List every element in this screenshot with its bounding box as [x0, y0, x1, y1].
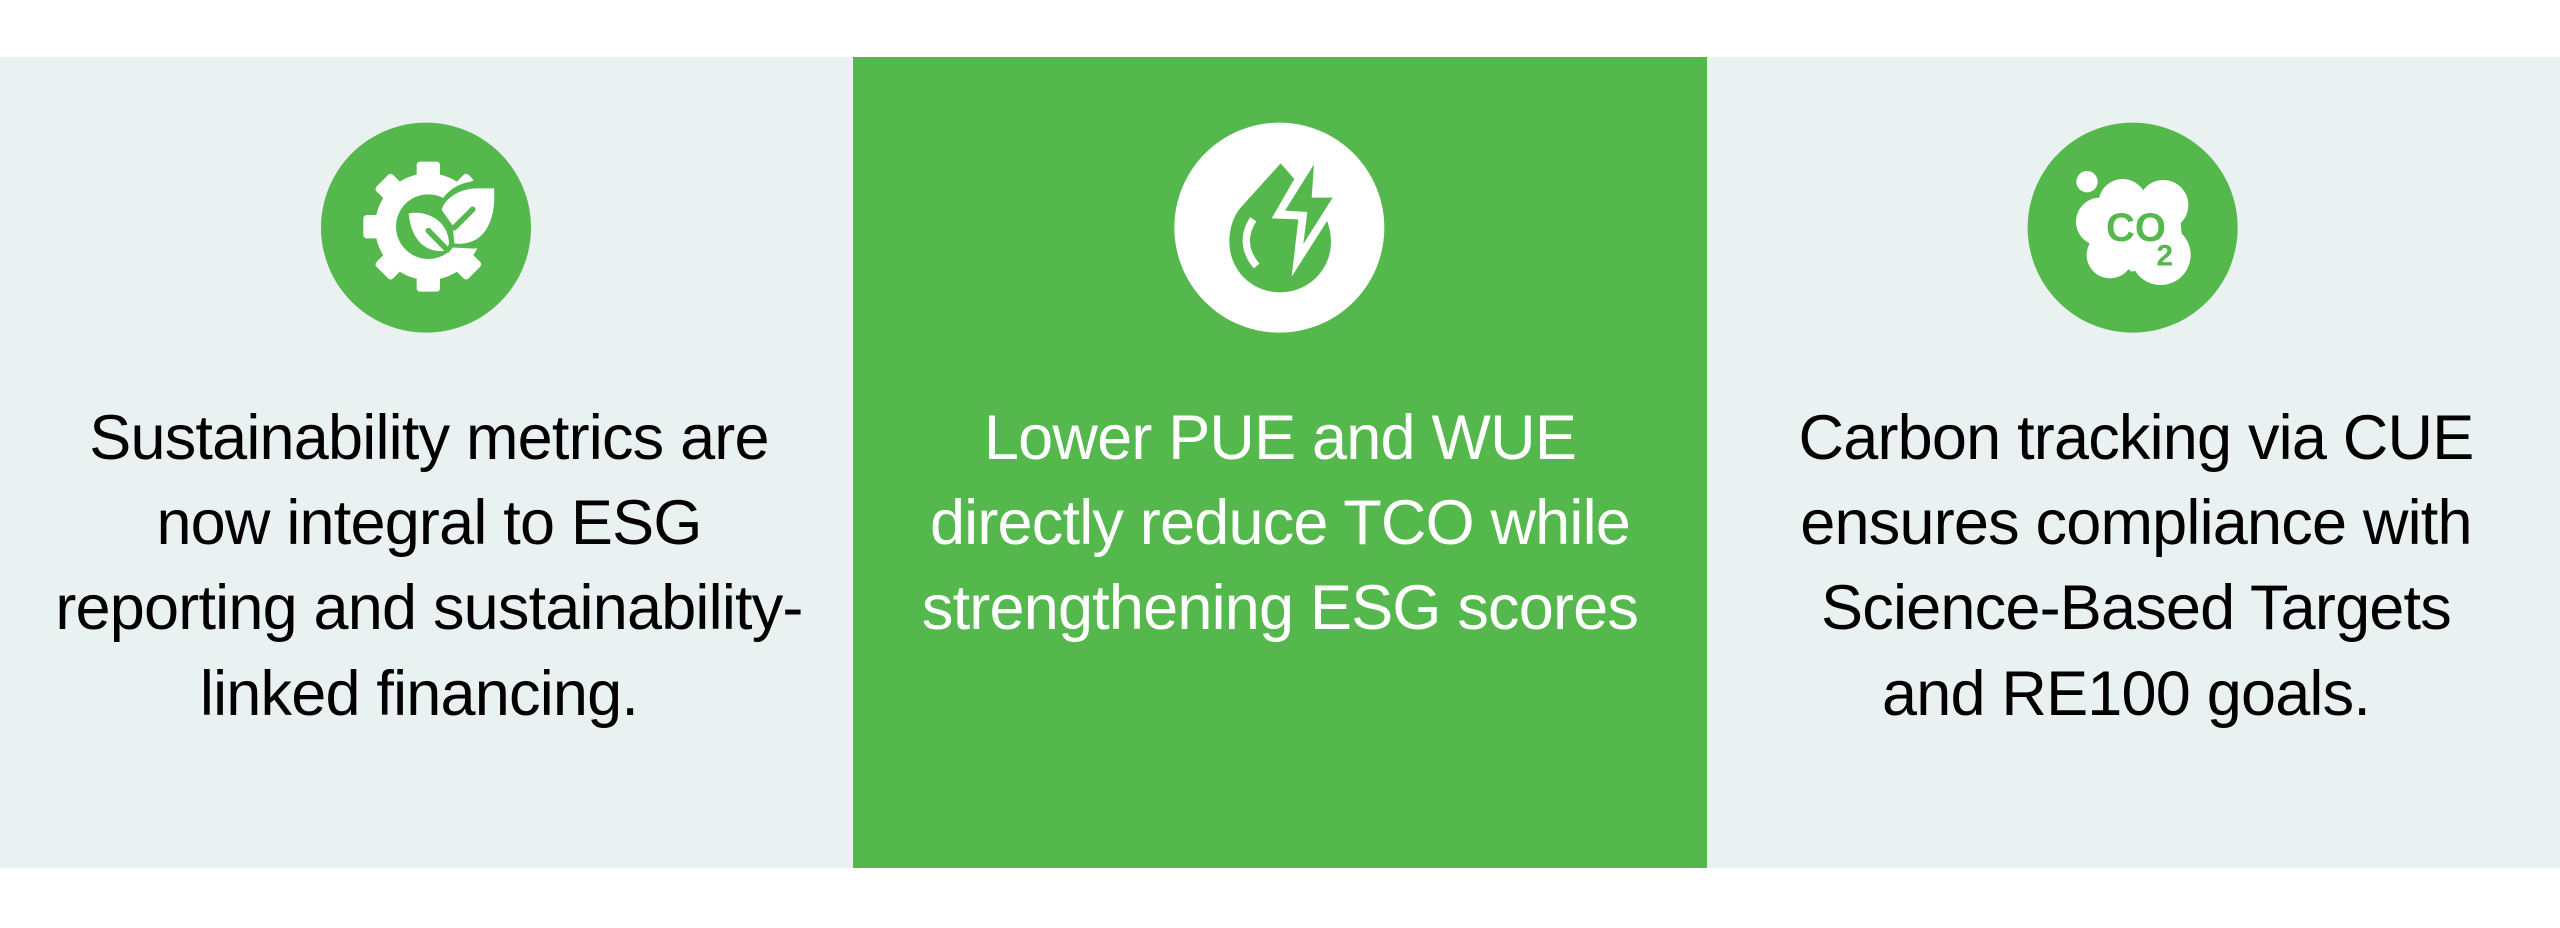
panel: PUE and WUE — [853, 57, 1707, 868]
icon: CO2 cloud — [2028, 123, 2238, 333]
text: sustainability statement: now integral to ESG — [156, 488, 702, 558]
text: carbon tracking statement: ensures compliance with — [1800, 488, 2472, 558]
text: PUE and WUE statement: Lower PUE and WUE — [984, 403, 1576, 473]
text: carbon tracking statement — [1799, 403, 2473, 729]
text: sustainability statement: reporting and sustainability- — [55, 573, 803, 643]
icon: water drop with lightning bolt — [1174, 123, 1384, 333]
panel: carbon tracking — [1707, 57, 2560, 868]
text: carbon tracking statement: Carbon tracking via CUE — [1799, 403, 2473, 473]
text: carbon tracking statement: Science-Based Targets — [1821, 573, 2451, 643]
icon: gear with leaves — [321, 123, 531, 333]
text: PUE and WUE statement: strengthening ESG scores — [922, 573, 1638, 643]
icon: CO2 cloud: CO — [2106, 206, 2166, 250]
text: PUE and WUE statement: directly reduce TCO while — [930, 488, 1630, 558]
text: PUE and WUE statement — [922, 403, 1638, 643]
text: sustainability statement: Sustainability metrics are — [89, 403, 769, 473]
text: carbon tracking statement: and RE100 goals. — [1882, 659, 2370, 729]
panel: sustainability metrics — [0, 57, 853, 868]
text: sustainability statement — [55, 403, 803, 729]
icon: CO2 cloud: 2 — [2156, 240, 2173, 273]
text: sustainability statement: linked financing. — [200, 659, 638, 729]
